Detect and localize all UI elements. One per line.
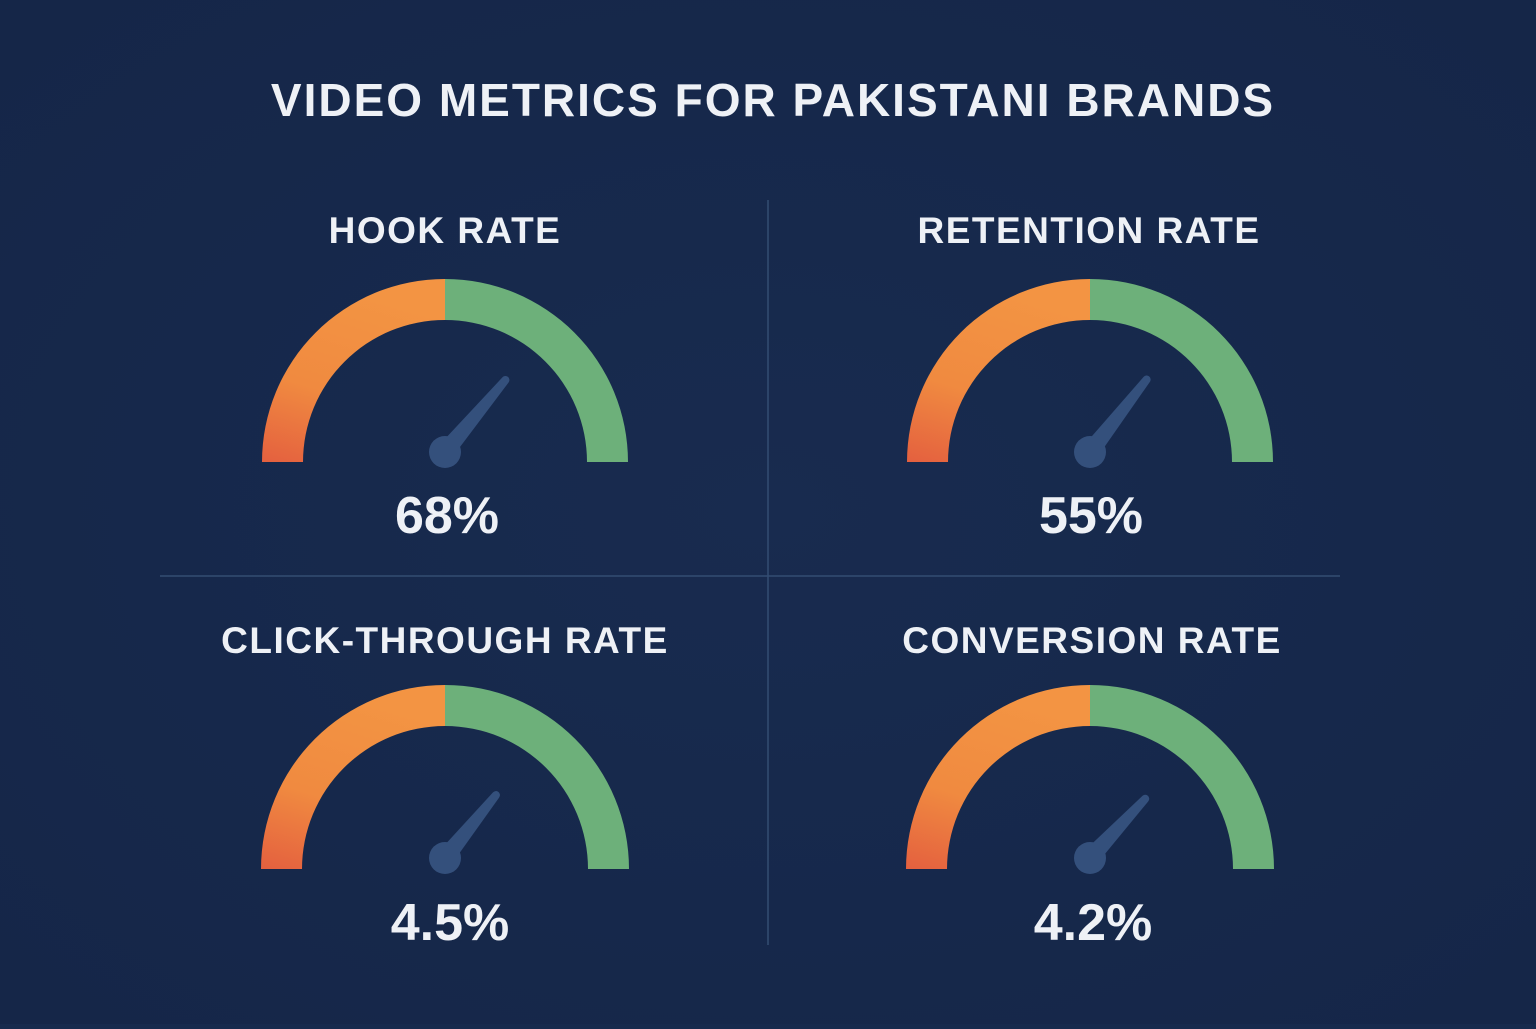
heading: retention rate: RETENTION RATE: [917, 210, 1261, 251]
title: VIDEO METRICS FOR PAKISTANI BRANDS: [271, 74, 1275, 126]
value: click-through rate: 4.5%: [391, 894, 509, 952]
gauge: conversion rate: [906, 685, 1274, 874]
heading: hook rate: HOOK RATE: [329, 210, 561, 251]
value: retention rate: 55%: [1039, 487, 1143, 545]
value: conversion rate: 4.2%: [1034, 894, 1152, 952]
heading: conversion rate: CONVERSION RATE: [902, 620, 1282, 661]
heading: click-through rate: CLICK-THROUGH RATE: [221, 620, 669, 661]
panel: hook rate: [262, 210, 628, 545]
panel: click-through rate: [221, 620, 669, 952]
gauge: retention rate: [907, 279, 1273, 468]
panel: retention rate: [907, 210, 1273, 545]
value: hook rate: 68%: [395, 487, 499, 545]
panel: conversion rate: [902, 620, 1282, 952]
gauge: hook rate: [262, 279, 628, 468]
gauge: click-through rate: [261, 685, 629, 874]
